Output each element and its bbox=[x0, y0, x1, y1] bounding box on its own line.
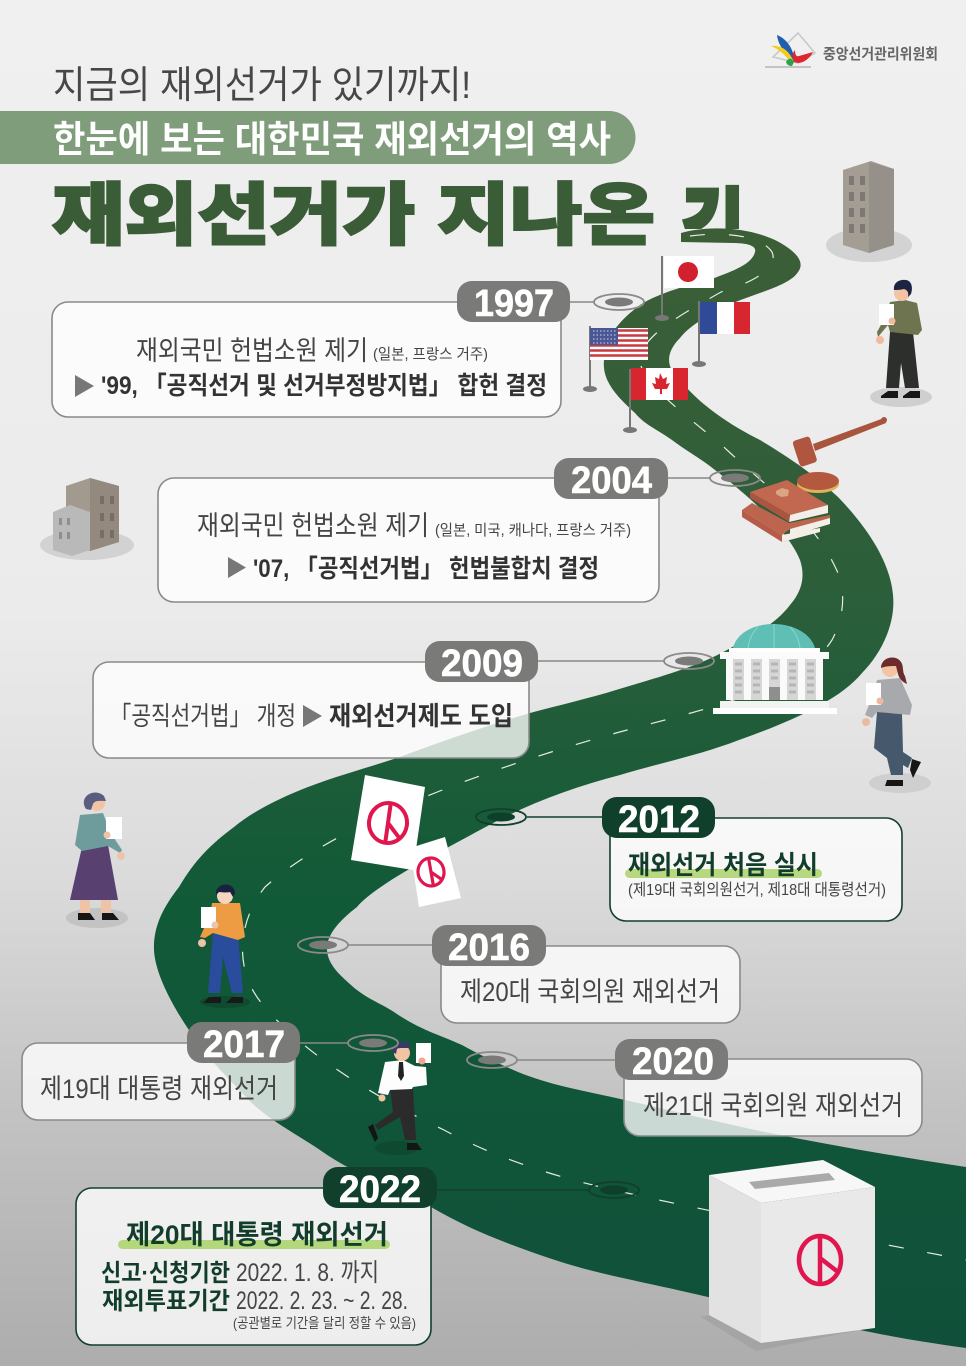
timeline 2004: 2004 bbox=[571, 460, 652, 502]
road centre line bbox=[242, 234, 966, 1260]
icon: ballot box bbox=[701, 1160, 876, 1351]
icon: flag of France bbox=[692, 301, 750, 367]
timeline 2020: 제21대 국회의원 재외선거 bbox=[643, 1091, 903, 1121]
icon: tower building bbox=[826, 161, 912, 262]
timeline 1997: '99, 「공직선거 및 선거부정방지법」 합헌 결정 bbox=[101, 372, 547, 400]
icon: woman in purple skirt bbox=[66, 793, 128, 928]
main title: 길 bbox=[680, 181, 745, 288]
timeline 2022: 재외투표기간 bbox=[102, 1288, 230, 1315]
timeline 2012 bbox=[476, 797, 902, 921]
timeline 2020 bbox=[467, 1039, 922, 1136]
timeline 2017: 2017 bbox=[203, 1024, 285, 1066]
icon: flag of USA bbox=[583, 326, 648, 392]
timeline 2017 bbox=[22, 1022, 398, 1120]
icon: large ballot paper bbox=[351, 775, 425, 870]
timeline 1997: 1997 bbox=[474, 283, 554, 325]
timeline 2022: (공관별로 기간을 달리 정할 수 있음) bbox=[233, 1315, 416, 1331]
timeline 2012: (제19대 국회의원선거, 제18대 대통령선거) bbox=[628, 881, 886, 899]
timeline 2004 bbox=[158, 458, 760, 602]
timeline 2009 bbox=[93, 641, 714, 758]
logo: election commission bbox=[765, 33, 938, 67]
timeline 2004: '07, 「공직선거법」 헌법불합치 결정 bbox=[253, 555, 599, 583]
logo: election commission: 중앙선거관리위원회 bbox=[823, 46, 938, 63]
timeline 2016 bbox=[298, 925, 740, 1023]
icon: flag of Japan bbox=[655, 256, 714, 321]
icon: National Assembly building bbox=[713, 624, 837, 714]
icon: flag of Canada bbox=[623, 368, 688, 433]
timeline 2004: (일본, 미국, 캐나다, 프랑스 거주) bbox=[435, 522, 631, 539]
timeline 2017: 제19대 대통령 재외선거 bbox=[40, 1074, 278, 1104]
timeline 2022: 2022. 2. 23. ~ 2. 28. bbox=[236, 1287, 408, 1315]
icon: man in white shirt walking bbox=[368, 1042, 431, 1155]
heading band: 한눈에 보는 대한민국 재외선거의 역사 bbox=[53, 119, 611, 160]
timeline 2022: 2022 bbox=[339, 1169, 421, 1211]
icon: gavel bbox=[792, 417, 887, 493]
timeline 2009: 재외선거제도 도입 bbox=[329, 701, 513, 731]
road bbox=[154, 228, 966, 1348]
icon: law books bbox=[742, 480, 830, 542]
timeline 2022: 신고·신청기한 bbox=[101, 1260, 230, 1287]
timeline 2022 bbox=[76, 1167, 639, 1345]
timeline 2012: 재외선거 처음 실시 bbox=[628, 850, 818, 880]
timeline 2020: 2020 bbox=[632, 1041, 714, 1083]
main title bbox=[51, 180, 740, 247]
icon: small ballot paper bbox=[410, 837, 461, 907]
timeline 1997: 재외국민 헌법소원 제기 bbox=[136, 336, 368, 366]
icon: person with olive sweater bbox=[870, 280, 932, 407]
timeline 2022: 2022. 1. 8. 까지 bbox=[236, 1259, 379, 1287]
heading: subtitle line: 지금의 재외선거가 있기까지! bbox=[53, 65, 471, 107]
timeline 2004: 재외국민 헌법소원 제기 bbox=[197, 511, 429, 541]
timeline 2016: 제20대 국회의원 재외선거 bbox=[460, 977, 720, 1007]
timeline 2009: 「공직선거법」 개정 bbox=[110, 701, 296, 731]
main title: 재외선거가 지나온 bbox=[52, 178, 655, 254]
icon: left buildings bbox=[40, 478, 134, 560]
icon: man in orange sweater bbox=[198, 885, 250, 1008]
icon: woman in grey sweater bbox=[862, 657, 931, 793]
timeline 2016: 2016 bbox=[448, 927, 530, 969]
timeline 2022: 제20대 대통령 재외선거 bbox=[126, 1220, 388, 1250]
timeline 1997: (일본, 프랑스 거주) bbox=[373, 346, 488, 363]
timeline 2009: 2009 bbox=[441, 643, 523, 685]
timeline 1997 bbox=[52, 281, 644, 417]
timeline 2012: 2012 bbox=[618, 799, 700, 841]
